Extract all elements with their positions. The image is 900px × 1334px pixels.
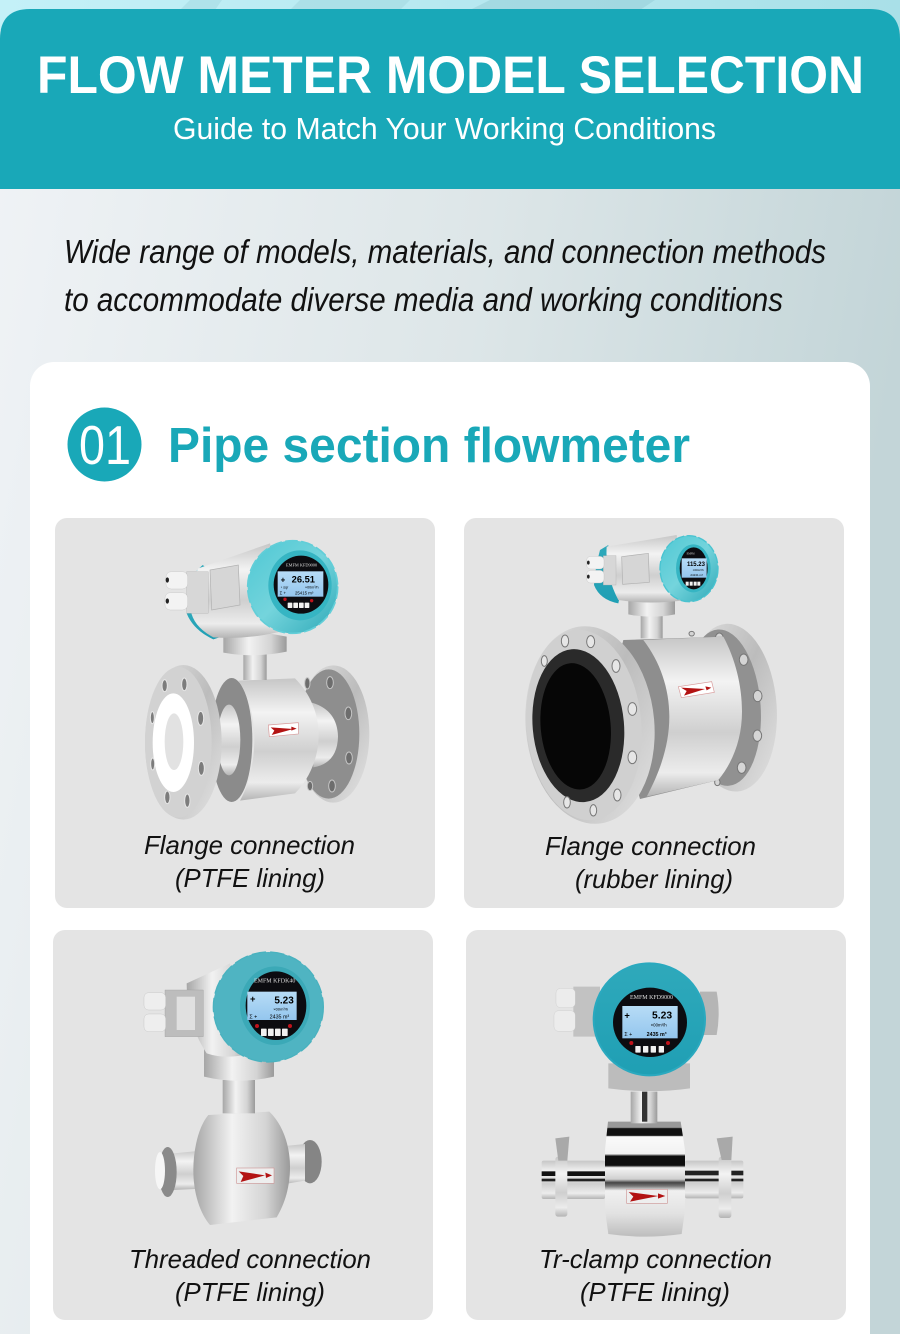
intro text: Wide range of models, materials, and connection methods (64, 233, 826, 270)
meter display: 25415 m³ (295, 591, 314, 596)
meter display: 2435 m³ (270, 1014, 289, 1020)
meter display: 5.23 (652, 1010, 672, 1021)
icon: flow arrow (237, 1168, 274, 1183)
number badge: 01 (79, 414, 131, 476)
top strip (0, 0, 900, 30)
meter display: Σ + (280, 591, 287, 596)
meter display: EMFM KFD9000 (630, 995, 673, 1001)
meter display (622, 995, 678, 1038)
icon: flow arrow (268, 723, 298, 737)
caption (545, 831, 756, 894)
meter display: 5.23 (274, 995, 294, 1006)
icon: flow arrow (678, 682, 714, 698)
caption: (PTFE lining) (580, 1277, 730, 1307)
meter display: 115.23 (687, 562, 706, 568)
caption: Threaded connection (129, 1244, 371, 1274)
meter display (247, 979, 297, 1020)
meter display (682, 552, 707, 578)
intro text (64, 233, 826, 318)
meter display: 24131 m³ (690, 573, 703, 577)
card: flange rubber (464, 518, 844, 908)
caption: Tr-clamp connection (539, 1244, 772, 1274)
meter display: ×00m³/h (305, 586, 319, 590)
caption: (PTFE lining) (175, 1277, 325, 1307)
meter display: EMFM KFDK40 (254, 979, 295, 985)
caption (539, 1244, 772, 1307)
meter display: EMFM (687, 552, 695, 555)
caption: Flange connection (545, 831, 756, 861)
intro text: to accommodate diverse media and working conditions (64, 281, 783, 318)
number badge (68, 408, 142, 482)
meter display: ◔ sqr (280, 586, 289, 590)
meter display: EMFM KFD9000 (286, 563, 317, 568)
meter: threaded (144, 952, 323, 1225)
title: FLOW METER MODEL SELECTION (37, 46, 864, 105)
meter display: 26.51 (292, 575, 315, 585)
meter display: 2435 m³ (647, 1032, 667, 1038)
subtitle: Guide to Match Your Working Conditions (173, 111, 716, 146)
meter display: ×00m³/h (693, 568, 704, 572)
meter: flange PTFE (145, 541, 369, 820)
caption: (rubber lining) (575, 864, 733, 894)
section heading: Pipe section flowmeter (168, 419, 690, 473)
card: threaded (53, 930, 433, 1320)
meter display: + (250, 994, 256, 1004)
icon: flow arrow (627, 1189, 667, 1203)
caption: Flange connection (144, 830, 355, 860)
card: tr-clamp (466, 930, 846, 1320)
panel: pipe section flowmeter (30, 362, 870, 1334)
meter display (278, 563, 323, 597)
meter display: ×00m³/h (273, 1006, 288, 1011)
meter display: + (624, 1010, 630, 1020)
meter display: Σ + (249, 1014, 257, 1020)
meter: flange rubber (517, 535, 782, 829)
caption (129, 1244, 371, 1307)
meter: tr-clamp (542, 963, 743, 1237)
card: flange PTFE (55, 518, 435, 908)
caption (144, 830, 355, 893)
meter display: Σ + (624, 1032, 632, 1038)
clamps (555, 1137, 733, 1218)
caption: (PTFE lining) (175, 863, 325, 893)
meter display: ×00m³/h (651, 1023, 667, 1028)
header banner (0, 9, 900, 189)
meter display: + (281, 576, 286, 585)
